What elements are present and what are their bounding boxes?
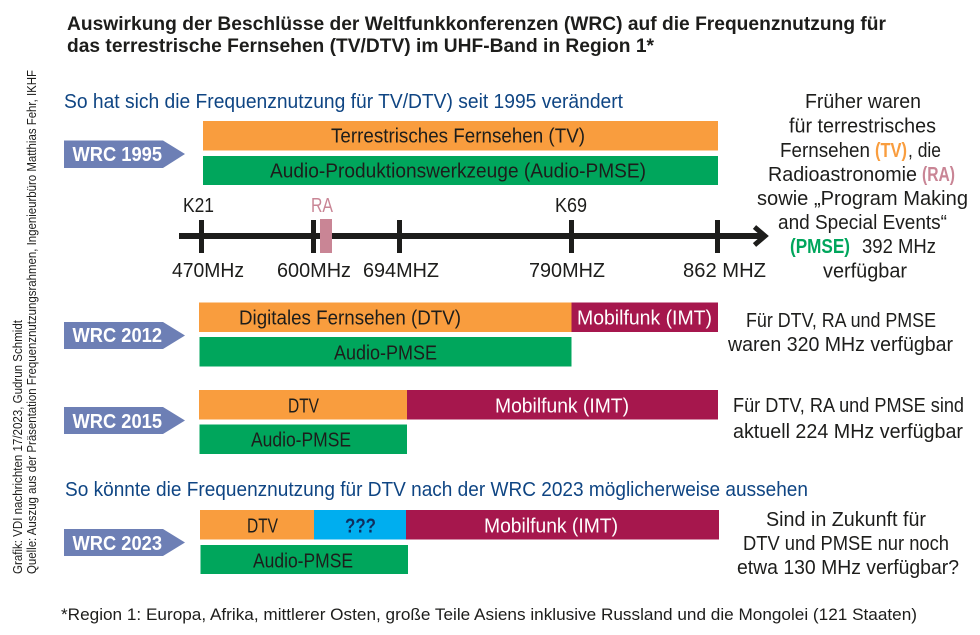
bar: DTV 2023 [200, 510, 314, 540]
note: 1995 availability: (TV) [875, 140, 907, 162]
bar: DTV 2023: DTV [247, 516, 279, 538]
frequency labels: 790MHZ [529, 260, 605, 282]
note: 1995 availability: and Special Events“ [778, 212, 947, 234]
bar: Terrestrisches Fernsehen: Terrestrisches Fernsehen (TV) [331, 126, 585, 148]
channel labels: K21 [183, 195, 214, 217]
source credit: Quelle: Auszug aus der Präsentation Frequenznutzungsrahmen, Ingenieurbüro Matthias Fehr, IKHF [24, 70, 39, 574]
source credit [10, 70, 39, 574]
note: 1995 availability: (RA) [922, 164, 955, 186]
note: 1995 availability: , die [908, 140, 941, 162]
title [67, 14, 887, 57]
label: WRC 1995: WRC 1995 [72, 143, 162, 166]
note: 1995 availability: verfügbar [823, 260, 907, 282]
bar: Mobilfunk 2023: Mobilfunk (IMT) [484, 516, 618, 538]
bar: Mobilfunk 2015 [407, 390, 718, 420]
heading: since 1995: So hat sich die Frequenznutzung für TV/DTV) seit 1995 verändert [64, 90, 623, 113]
bar: Digitales Fernsehen: Digitales Fernsehen (DTV) [239, 308, 461, 330]
bar: Audio-PMSE 2012: Audio-PMSE [334, 342, 437, 364]
bar: DTV 2015: DTV [288, 396, 320, 418]
frequency labels: 862 MHZ [683, 260, 766, 282]
frequency labels [172, 260, 766, 282]
note: 1995 availability: für terrestrisches [789, 116, 936, 138]
bar: unknown band: ??? [345, 516, 376, 538]
note: 2015 availability: aktuell 224 MHz verfügbar [733, 421, 963, 443]
label: WRC 2015: WRC 2015 [72, 410, 162, 433]
bar: Audio-PMSE 2023: Audio-PMSE [253, 550, 353, 572]
note: 2012 availability [727, 310, 953, 356]
bar: Audio-Produktionswerkzeuge [203, 156, 718, 185]
bar: Audio-Produktionswerkzeuge: Audio-Produktionswerkzeuge (Audio-PMSE) [270, 160, 646, 182]
note: 2023 outlook: etwa 130 MHz verfügbar? [737, 557, 959, 579]
bar: Mobilfunk 2015: Mobilfunk (IMT) [495, 396, 629, 418]
note: 1995 availability: Fernsehen [780, 140, 870, 162]
note: 2012 availability: waren 320 MHz verfügbar [727, 334, 953, 356]
channel labels: K69 [555, 195, 587, 217]
note: 2015 availability [733, 395, 964, 443]
title: Auswirkung der Beschlüsse der Weltfunkkonferenzen (WRC) auf die Frequenznutzung für [67, 14, 887, 35]
bar: Audio-PMSE 2015: Audio-PMSE [251, 430, 351, 452]
title: das terrestrische Fernsehen (TV/DTV) im UHF-Band in Region 1* [67, 36, 655, 57]
label: WRC 2012: WRC 2012 [72, 324, 162, 347]
bar: Audio-PMSE 2012 [200, 337, 572, 366]
frequency labels: 694MHZ [363, 260, 439, 282]
note: 2023 outlook: Sind in Zukunft für [766, 509, 926, 531]
bar: Digitales Fernsehen [199, 302, 572, 332]
note: 1995 availability: 392 MHz [862, 236, 936, 258]
bar: Mobilfunk 2012: Mobilfunk (IMT) [577, 308, 712, 330]
note: 1995 availability: Radioastronomie [768, 164, 917, 186]
channel labels: RA [311, 195, 334, 217]
note: 1995 availability: sowie „Program Making [757, 188, 968, 210]
footnote: *Region 1: Europa, Afrika, mittlerer Osten, große Teile Asiens inklusive Russland und die Mongolei (121 Staaten) [61, 605, 917, 624]
bar: unknown band [314, 510, 406, 540]
note: 2023 outlook [737, 509, 959, 579]
frequency labels: 470MHz [172, 260, 244, 282]
bar: Terrestrisches Fernsehen [203, 121, 718, 150]
frequency labels: 600MHz [277, 260, 351, 282]
bar: DTV 2015 [199, 390, 407, 420]
bar: Mobilfunk 2023 [406, 510, 719, 540]
note: 2012 availability: Für DTV, RA und PMSE [746, 310, 936, 332]
label: WRC 1995 [64, 140, 185, 168]
frequency axis [179, 219, 765, 253]
note: 2023 outlook: DTV und PMSE nur noch [743, 533, 949, 555]
source credit: Grafik: VDI nachrichten 17/2023, Gudrun Schmidt [10, 320, 25, 574]
note: 1995 availability: Früher waren [805, 91, 921, 113]
bar: Audio-PMSE 2015 [200, 424, 407, 454]
channel labels [183, 195, 587, 217]
label: WRC 2023: WRC 2023 [72, 532, 162, 555]
bar: Audio-PMSE 2023 [200, 545, 408, 574]
note: 1995 availability: (PMSE) [790, 236, 850, 258]
note: 1995 availability [757, 91, 968, 282]
heading: after WRC 2023: So könnte die Frequenznutzung für DTV nach der WRC 2023 möglicherweise aussehen [65, 478, 808, 501]
